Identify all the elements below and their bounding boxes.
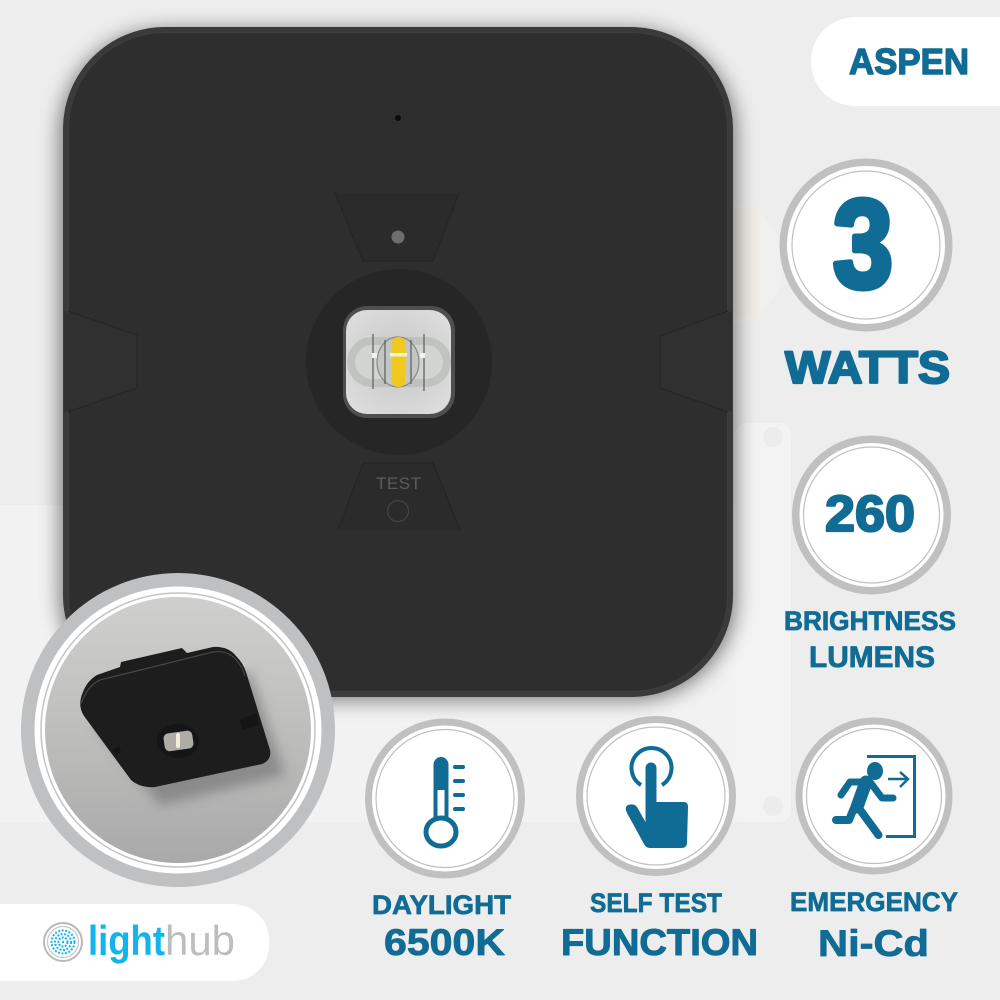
lumens label: LUMENS: [809, 641, 935, 674]
feature: emergency Ni-Cd: [790, 718, 958, 964]
icon: pressing finger: [626, 748, 688, 848]
sensor pinhole: [395, 115, 401, 121]
model name: ASPEN: [849, 41, 969, 82]
top trapezoid with indicator LED: [335, 193, 459, 261]
product: black emergency light, front view: [60, 27, 736, 700]
LED lens: [343, 306, 455, 418]
icon: running man exit: [836, 756, 914, 836]
stat: 260 lumens: [784, 436, 956, 674]
bottom trapezoid with test button: TEST: [376, 474, 421, 493]
number 3: 3: [833, 175, 893, 314]
bottom trapezoid with test button: [338, 463, 460, 530]
inset photo: installed on ceiling: [21, 573, 335, 887]
brightness label: BRIGHTNESS: [784, 606, 956, 636]
feature: daylight 6500K: [365, 718, 525, 963]
lens surround: [306, 269, 492, 455]
logo mark: [44, 923, 82, 961]
function label: FUNCTION: [561, 922, 758, 963]
self test label: SELF TEST: [590, 888, 722, 918]
number 260: 260: [825, 485, 915, 542]
model name pill: [811, 17, 1000, 106]
icon: thermometer: [426, 757, 465, 846]
logo wordmark: light: [88, 917, 165, 964]
side notch: left: [64, 311, 137, 412]
logo pill: lighthub: [0, 904, 269, 981]
daylight label: DAYLIGHT: [372, 890, 512, 920]
emergency label: EMERGENCY: [790, 887, 958, 917]
stat: 3 watts: [780, 158, 952, 393]
yellow LED element: [392, 337, 405, 387]
Ni-Cd label: Ni-Cd: [818, 923, 929, 964]
logo pill: lighthub: hub: [165, 917, 235, 964]
6500K label: 6500K: [384, 922, 505, 963]
side notch: right: [660, 311, 732, 412]
watts label: WATTS: [785, 342, 950, 393]
mini device: [80, 647, 270, 787]
feature: self test function: [561, 716, 758, 963]
